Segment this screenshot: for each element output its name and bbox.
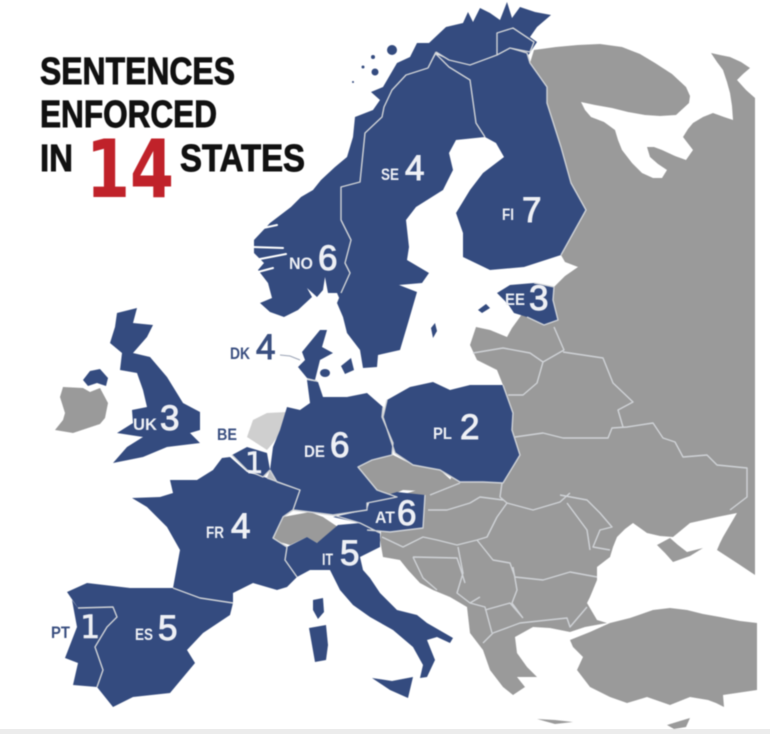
label: Poland 2: PL <box>433 424 452 443</box>
country: Germany <box>270 380 397 515</box>
label: Italy 5 <box>322 534 359 573</box>
label: United Kingdom 3: UK <box>133 415 158 434</box>
region: Crimea <box>657 538 703 562</box>
label: United Kingdom 3: 3 <box>160 399 179 438</box>
region: Northern Ireland <box>83 369 108 386</box>
label: Austria 6: AT <box>375 508 396 527</box>
island: Sicily <box>372 677 413 698</box>
label: Denmark 4: DK <box>230 344 251 363</box>
label: Italy 5: IT <box>322 550 333 569</box>
region: Netherlands <box>247 412 287 450</box>
leader line: Denmark <box>280 355 300 360</box>
label: Portugal 1: 1 <box>80 608 100 646</box>
region: Ireland <box>55 387 108 433</box>
title line: sentences: SENTENCES <box>40 51 235 93</box>
label: France 4: 4 <box>231 507 250 546</box>
label: Italy 5: 5 <box>340 534 359 573</box>
country: Belgium <box>232 447 270 477</box>
region: Cyprus <box>667 718 690 729</box>
label: Finland 7 <box>502 191 541 230</box>
label: Belgium 1 <box>217 425 263 480</box>
label: Estonia 3 <box>505 279 548 318</box>
region: eastern and non-enforcing Europe <box>380 44 755 695</box>
label: Spain 5: 5 <box>158 609 177 648</box>
label: Germany 6: DE <box>304 442 325 461</box>
island: Corsica <box>313 598 324 619</box>
region: Crete <box>537 719 573 724</box>
region: Luxembourg <box>267 470 277 482</box>
label: Norway 6: 6 <box>318 239 337 278</box>
title line: in: IN <box>40 138 73 180</box>
label: Sweden 4 <box>381 149 424 188</box>
label: Spain 5 <box>135 609 177 648</box>
country: Portugal <box>65 600 117 687</box>
island: Sardinia <box>309 625 328 662</box>
label: Estonia 3: 3 <box>529 279 548 318</box>
island: Lolland <box>341 358 354 374</box>
label: Portugal 1: PT <box>51 623 71 642</box>
label: United Kingdom 3 <box>133 399 179 438</box>
country: Italy <box>285 523 453 698</box>
country: Spain <box>67 583 233 707</box>
label: France 4: FR <box>206 523 224 542</box>
country: Sweden <box>337 54 485 368</box>
country: Estonia <box>497 283 558 325</box>
label: France 4 <box>206 507 250 546</box>
region: Switzerland <box>273 512 338 545</box>
coastal specks: northern Norway <box>352 45 397 83</box>
label: Estonia 3: EE <box>505 290 525 309</box>
label: Belgium 1: 1 <box>245 446 263 480</box>
cut-off footer text band <box>0 729 770 734</box>
label: Finland 7: 7 <box>522 191 541 230</box>
label: Germany 6 <box>304 426 349 465</box>
label: Finland 7: FI <box>502 205 514 224</box>
label: Sweden 4: 4 <box>405 149 424 188</box>
country: Norway <box>254 2 551 317</box>
island: Saaremaa <box>478 304 490 313</box>
title <box>40 51 305 216</box>
label: Norway 6 <box>289 239 337 278</box>
label: Denmark 4 <box>230 328 275 367</box>
country: Poland <box>383 382 520 483</box>
fjord notches: Norway <box>252 190 286 272</box>
label: Denmark 4: 4 <box>256 328 275 367</box>
region: Czech Republic <box>358 455 453 497</box>
label: Belgium 1: BE <box>217 425 237 444</box>
title line: enforced: ENFORCED <box>40 94 217 136</box>
country: Finland <box>436 48 586 270</box>
island: Zealand <box>320 369 330 377</box>
label: Portugal 1 <box>51 608 100 646</box>
title number: 14: 14 <box>86 123 174 216</box>
island: Gotland <box>431 323 437 338</box>
label: Poland 2 <box>433 408 479 447</box>
country: Denmark <box>298 330 354 380</box>
country: United Kingdom <box>83 308 200 463</box>
label: Germany 6: 6 <box>330 426 349 465</box>
label: Sweden 4: SE <box>381 165 399 184</box>
label: Austria 6: 6 <box>397 494 416 533</box>
label: Austria 6 <box>375 494 416 533</box>
title line: states: STATES <box>180 138 305 180</box>
region: Turkey <box>570 608 757 707</box>
label: Norway 6: NO <box>289 254 313 273</box>
country: France <box>132 457 300 603</box>
label: Spain 5: ES <box>135 625 153 644</box>
label: Poland 2: 2 <box>460 408 479 447</box>
country: Austria <box>333 492 425 532</box>
